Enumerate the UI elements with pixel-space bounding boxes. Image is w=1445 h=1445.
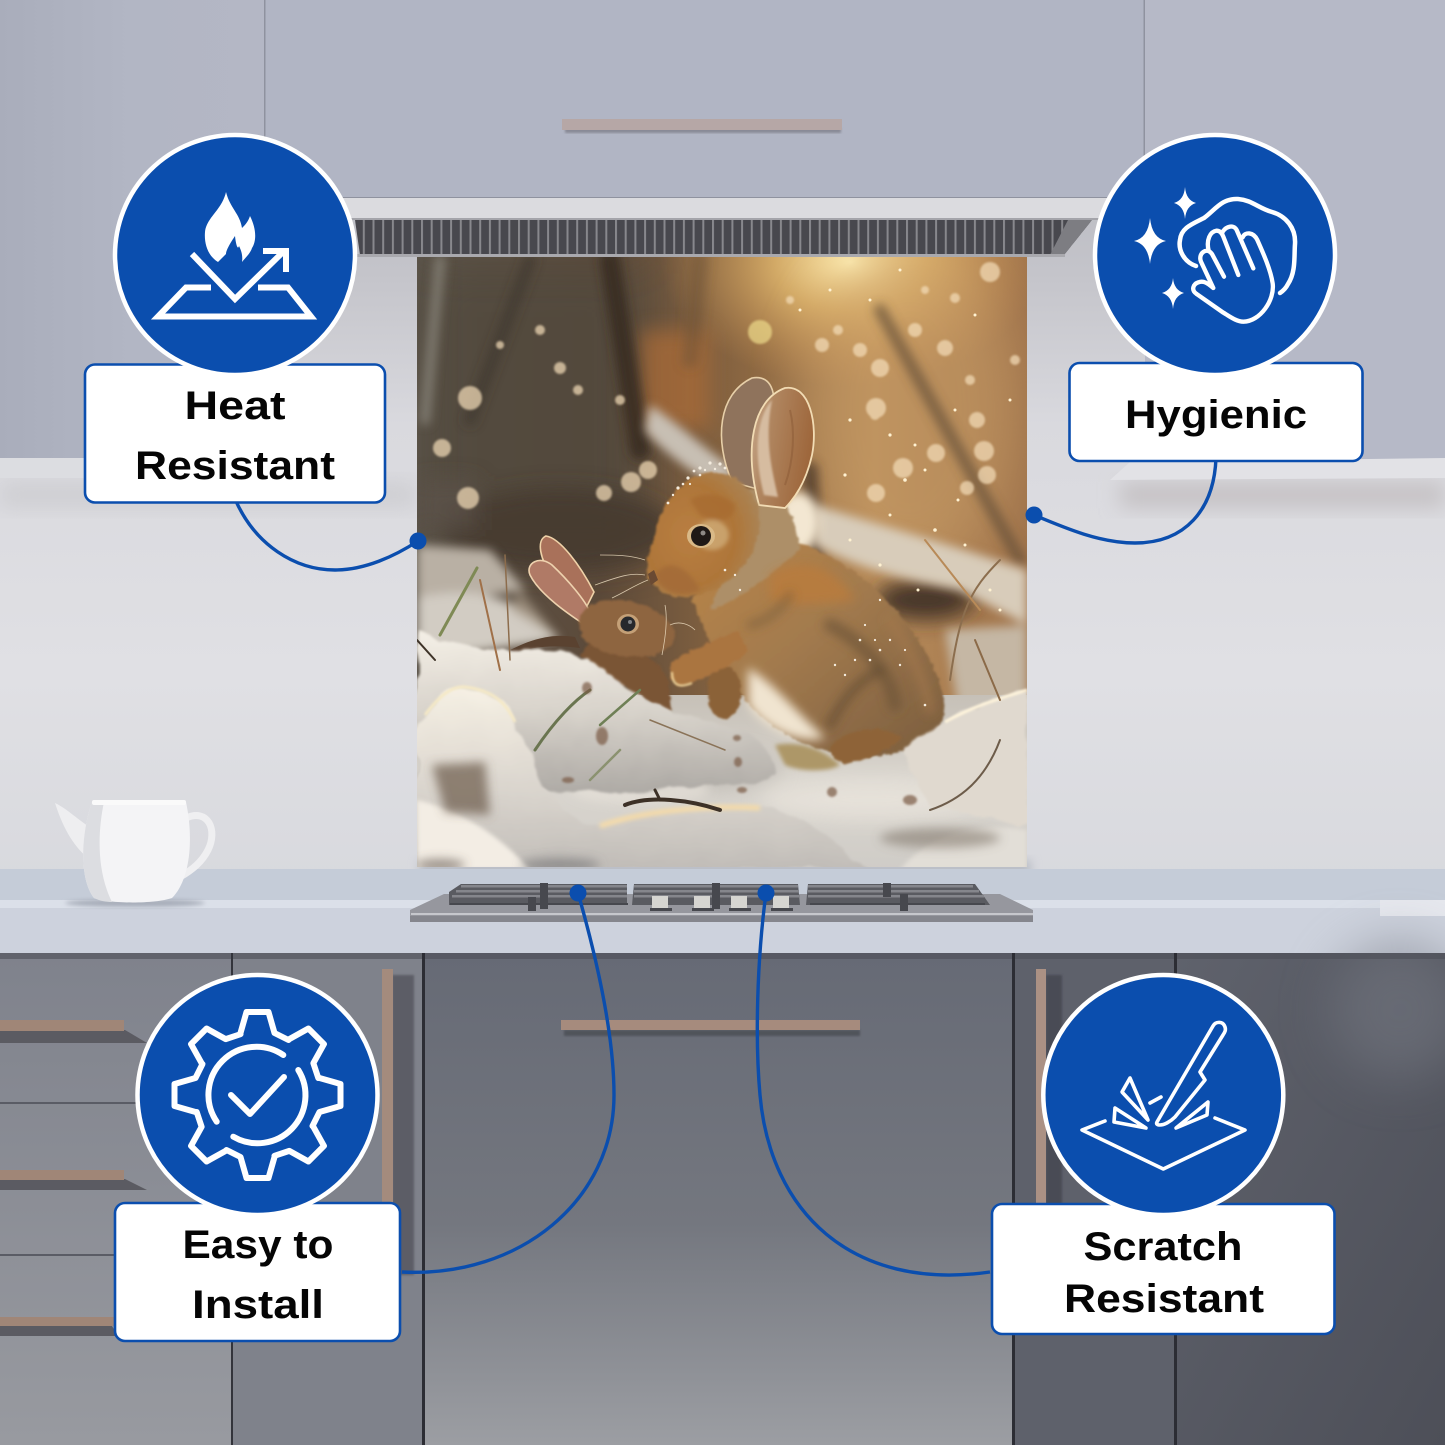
teapot — [55, 800, 212, 907]
golden trampled snow — [775, 744, 840, 770]
panel: scratch resistant — [992, 975, 1334, 1334]
connector: easy to install — [402, 884, 614, 1272]
white belly — [748, 668, 825, 740]
wall soft shadows — [0, 482, 1445, 508]
label box — [115, 1203, 400, 1341]
icon: flame over surface — [158, 192, 311, 316]
base cabinets — [0, 940, 1445, 1445]
small rabbit head — [579, 600, 675, 657]
eye — [687, 524, 715, 548]
small rabbit — [510, 536, 675, 712]
forest background — [417, 257, 1027, 695]
upper cabinet handle — [562, 119, 842, 133]
small rabbit body — [580, 640, 672, 712]
dark mid background — [417, 480, 975, 620]
neck — [710, 489, 800, 610]
front ear — [752, 388, 814, 508]
gas hob — [410, 883, 1033, 922]
icon: gear with check mark — [174, 1012, 340, 1178]
fallen leaves — [562, 682, 917, 805]
panel: heat resistant — [85, 135, 385, 502]
sparkling snow flecks — [798, 268, 1012, 612]
icon circle — [1043, 975, 1283, 1215]
label text: Scratch — [1084, 1225, 1242, 1269]
connector: hygienic — [1026, 458, 1216, 543]
label text: Heat — [184, 384, 286, 428]
icon: hand wiping with sparkles — [1134, 187, 1295, 322]
cooker hood — [340, 198, 1110, 257]
icon circle — [138, 975, 378, 1215]
label box — [85, 364, 385, 502]
back ear — [721, 378, 774, 492]
whiskers — [595, 555, 695, 655]
panel: heat resistant: Resistant — [135, 444, 335, 488]
upper cabinets — [0, 0, 1445, 460]
artwork: two rabbits in snow — [417, 257, 1027, 867]
nose — [648, 570, 658, 585]
fur shading — [750, 595, 930, 725]
small rabbit ears — [529, 536, 594, 625]
grass and twigs — [417, 540, 1000, 810]
falling snow bokeh — [433, 262, 1020, 509]
panel: easy to install: Install — [192, 1283, 324, 1327]
left shelf — [0, 458, 86, 478]
small rabbit eye — [617, 614, 639, 634]
label text: Hygienic — [1125, 393, 1307, 437]
front legs — [707, 665, 741, 719]
icon circle — [1095, 135, 1335, 375]
label text: Easy to — [182, 1223, 334, 1267]
dark snow shadows — [415, 762, 1000, 872]
label box — [1070, 363, 1362, 461]
cabinet handles — [0, 969, 1062, 1336]
panel: scratch resistant: Resistant — [1064, 1277, 1264, 1321]
large rabbit — [647, 378, 944, 764]
countertop — [0, 869, 1445, 953]
panel: hygienic — [1070, 135, 1362, 461]
right shelf — [1110, 458, 1445, 480]
snow ground — [417, 695, 1027, 870]
panel: easy to install — [115, 975, 400, 1341]
wall — [0, 190, 1445, 880]
head — [647, 473, 759, 597]
snow mounds — [417, 630, 1027, 870]
background snow — [417, 405, 1027, 720]
icon circle — [115, 135, 355, 375]
hind foot — [830, 729, 902, 764]
shoulder orange fur — [770, 565, 855, 604]
connector: scratch resistant — [757, 884, 990, 1275]
small rabbit paw — [510, 636, 580, 653]
connector: heat resistant — [235, 499, 426, 570]
snow dust on head — [667, 461, 926, 706]
body — [692, 542, 944, 756]
label box — [992, 1204, 1334, 1334]
brow and cheek fur — [655, 495, 735, 594]
neck glow — [776, 492, 820, 552]
artwork shadow — [419, 860, 1031, 878]
icon: knife scratching surface — [1082, 1022, 1245, 1169]
